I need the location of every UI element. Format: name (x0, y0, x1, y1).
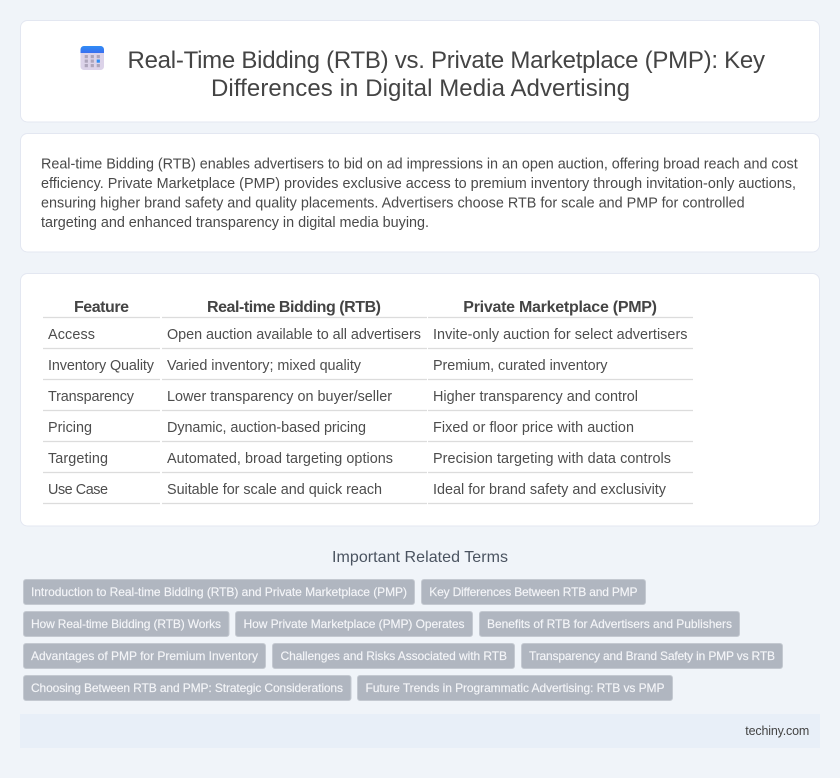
title: Differences in Digital Media Advertising (211, 75, 630, 102)
tag (24, 612, 229, 636)
tag (522, 644, 782, 668)
table header row: Feature (74, 299, 129, 316)
tag: Transparency and Brand Safety in PMP vs RTB (529, 649, 775, 663)
tag: Future Trends in Programmatic Advertising: RTB vs PMP (366, 681, 664, 695)
row: transparency (48, 389, 638, 405)
tag: Key Differences Between RTB and PMP (429, 585, 638, 599)
row: pricing: Pricing (48, 420, 92, 436)
tag: How Private Marketplace (PMP) Operates (244, 617, 464, 631)
panel: intro text: Real-time Bidding (RTB) enables advertisers to bid on ad impressions in an open auction, offering broad reach and cost (41, 156, 798, 172)
row: pricing: Fixed or floor price with auction (433, 420, 634, 436)
tag (480, 612, 740, 636)
panel: intro text: efficiency. Private Marketplace (PMP) provides exclusive access to premium inventory through invitation-only auctions, (41, 176, 796, 192)
tag (24, 676, 351, 700)
table header row: Private Marketplace (PMP) (463, 299, 657, 316)
icon: calendar (80, 46, 104, 70)
row: inventory quality: Varied inventory; mixed quality (167, 358, 362, 374)
tag (24, 580, 414, 604)
row: transparency: Transparency (48, 389, 135, 405)
tag: Choosing Between RTB and PMP: Strategic Considerations (31, 681, 343, 695)
tag (24, 644, 266, 668)
panel: comparison table (20, 274, 820, 526)
row: use case: Use Case (48, 482, 108, 498)
row: targeting: Targeting (48, 451, 108, 467)
related term tags (24, 580, 782, 700)
row: targeting (48, 451, 671, 467)
tag (358, 676, 672, 700)
row: access: Invite-only auction for select advertisers (433, 327, 688, 343)
title: Real-Time Bidding (RTB) vs. Private Marketplace (PMP): Key (128, 47, 765, 74)
tag: How Real-time Bidding (RTB) Works (31, 617, 221, 631)
tag: Introduction to Real-time Bidding (RTB) and Private Marketplace (PMP) (31, 585, 407, 599)
tag (272, 644, 514, 668)
row: transparency: Higher transparency and control (433, 389, 638, 405)
footer (20, 714, 820, 748)
row: access: Access (48, 327, 95, 343)
tag: Challenges and Risks Associated with RTB (280, 649, 507, 663)
panel: intro text: ensuring higher brand safety and quality placements. Advertisers choose RTB for scale and PMP for controlled (41, 195, 745, 211)
tag (422, 580, 646, 604)
panel: intro text (20, 134, 820, 252)
row: inventory quality: Premium, curated inventory (433, 358, 608, 374)
table header row: Real-time Bidding (RTB) (207, 299, 381, 316)
row: pricing (48, 420, 634, 436)
row: use case: Ideal for brand safety and exclusivity (433, 482, 667, 498)
row: inventory quality (48, 358, 608, 374)
row: inventory quality: Inventory Quality (48, 358, 155, 374)
tag (236, 612, 472, 636)
panel: header (20, 20, 820, 122)
row: use case: Suitable for scale and quick reach (167, 482, 382, 498)
table header row (74, 299, 657, 316)
row: access (48, 327, 688, 343)
row: targeting: Automated, broad targeting options (167, 451, 393, 467)
row: targeting: Precision targeting with data controls (433, 451, 671, 467)
title (128, 47, 765, 102)
row: transparency: Lower transparency on buyer/seller (167, 389, 392, 405)
tag: Benefits of RTB for Advertisers and Publishers (487, 617, 732, 631)
footer: techiny.com (745, 724, 809, 738)
row: pricing: Dynamic, auction-based pricing (167, 420, 366, 436)
heading: related terms: Important Related Terms (332, 549, 508, 566)
tag: Advantages of PMP for Premium Inventory (31, 649, 258, 663)
panel: intro text: targeting and enhanced transparency in digital media buying. (41, 215, 429, 231)
row: access: Open auction available to all advertisers (167, 327, 421, 343)
row: use case (48, 482, 667, 498)
